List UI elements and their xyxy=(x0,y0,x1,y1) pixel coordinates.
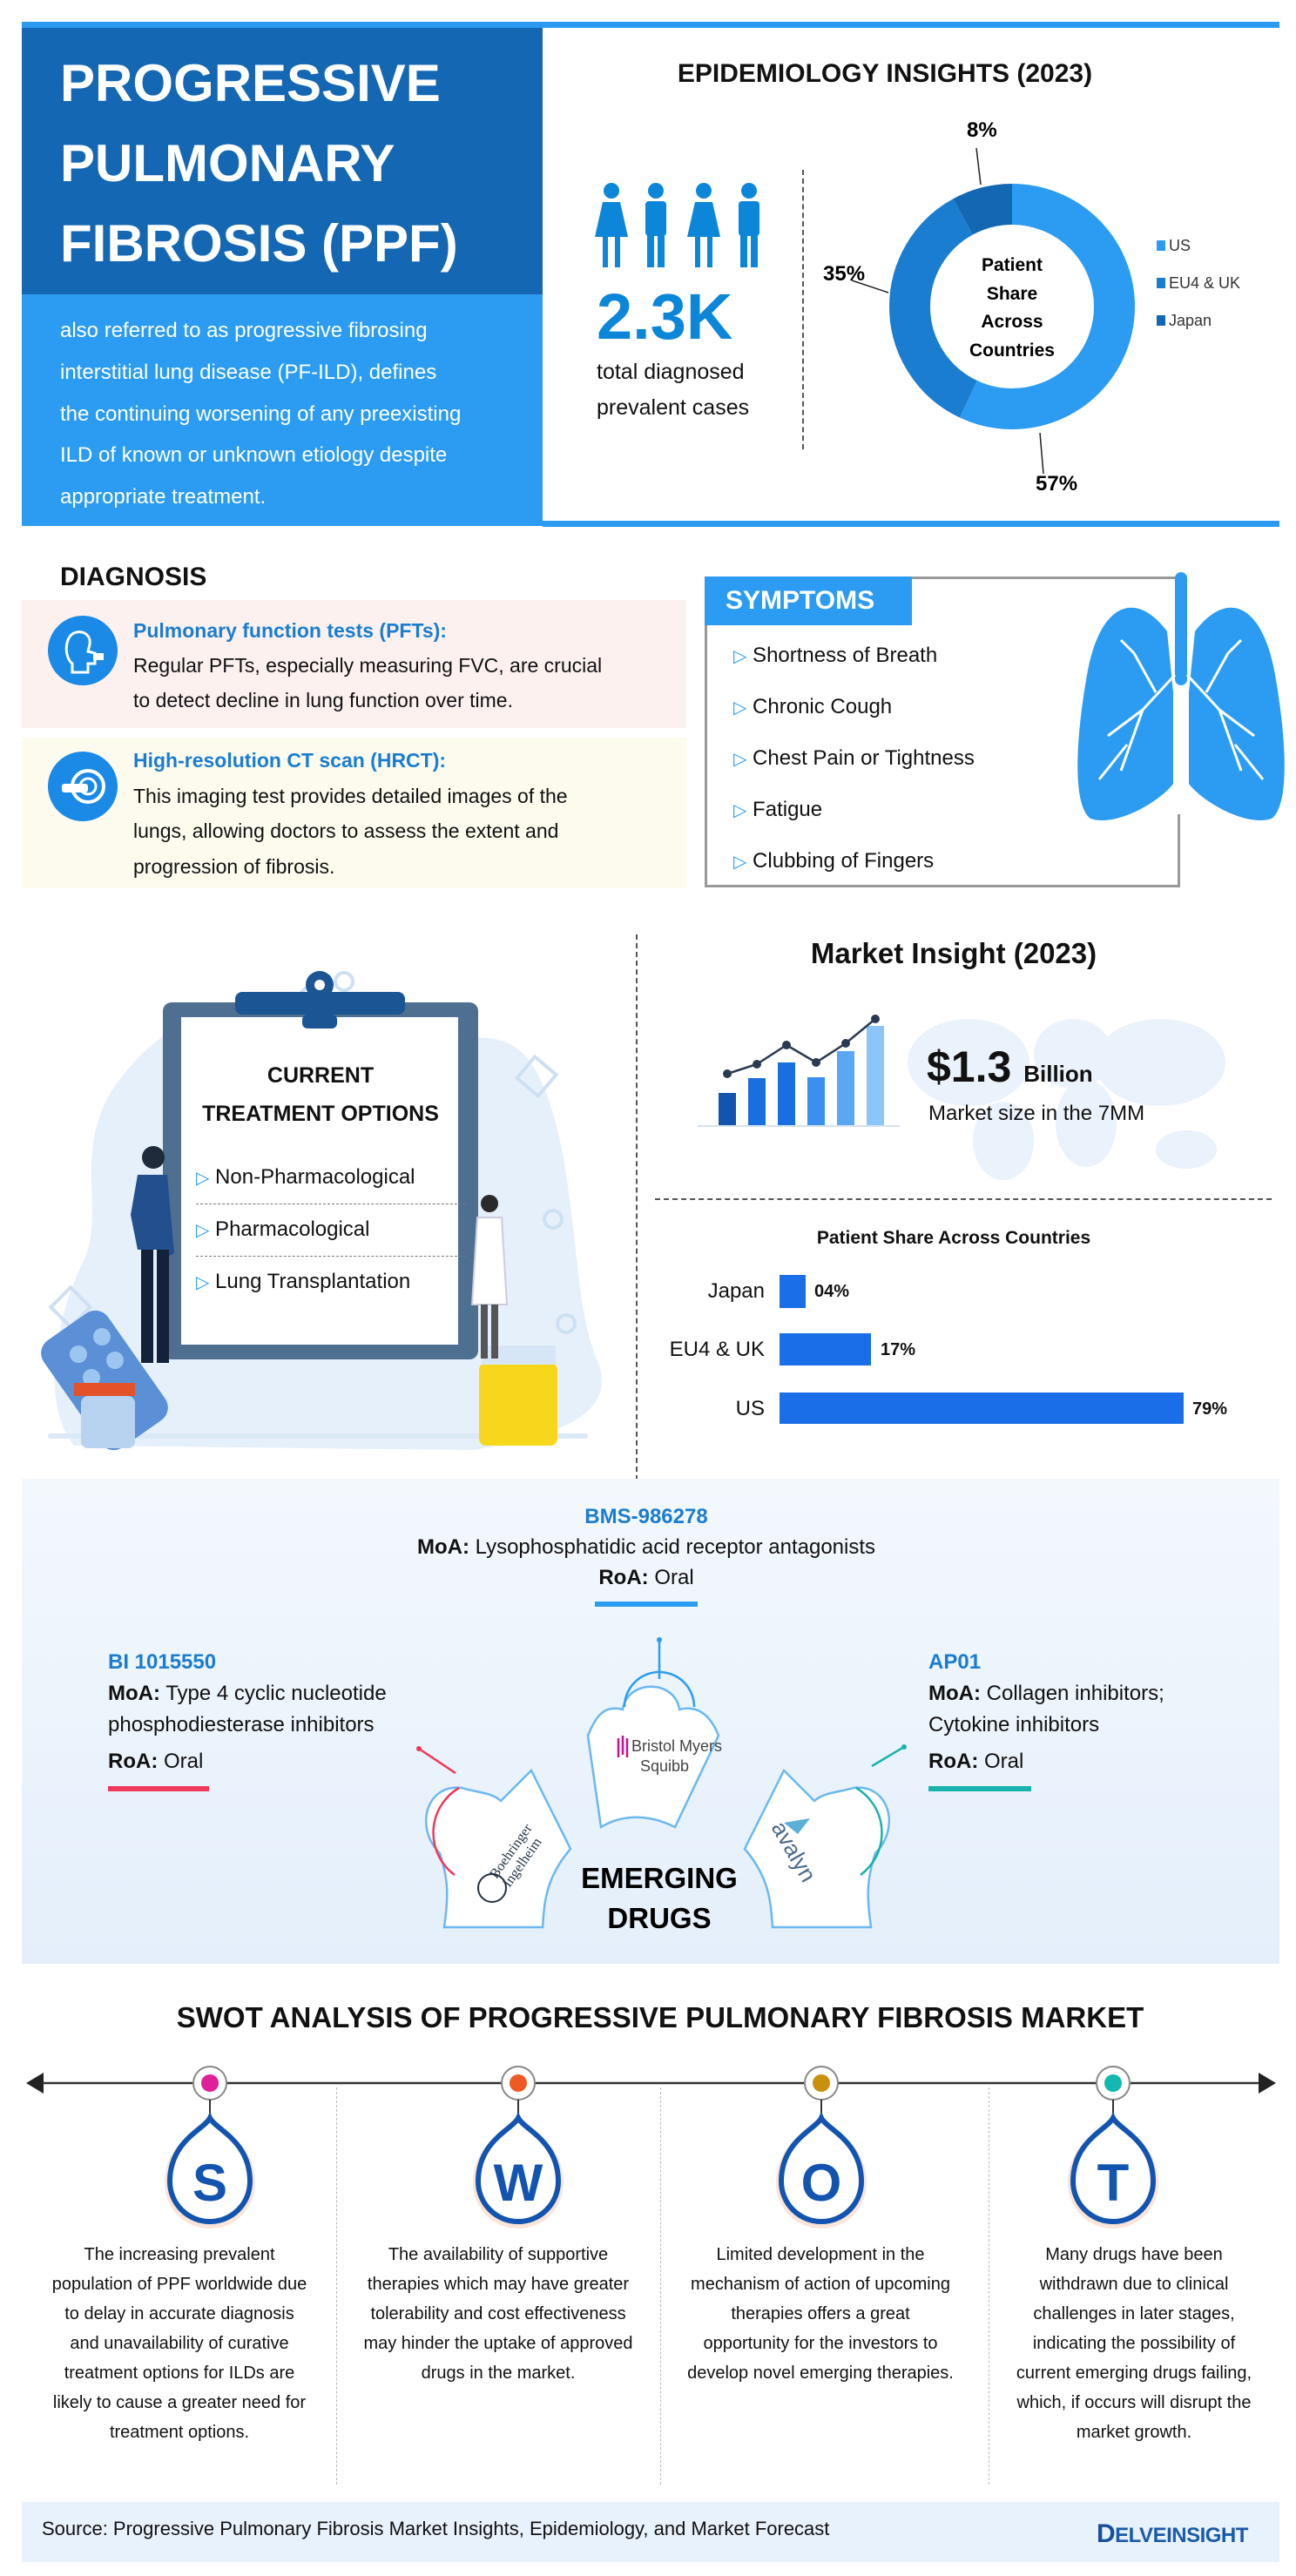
symptoms list: ▷ Shortness of Breath xyxy=(733,644,937,667)
bar chart: patient share: Patient Share Across Countries xyxy=(817,1228,1090,1248)
stat caption xyxy=(597,360,749,420)
SWOT: W: drugs in the market. xyxy=(422,2364,575,2383)
treatment heading: TREATMENT OPTIONS xyxy=(202,1102,439,1126)
drug: BI 1015550 xyxy=(108,1650,387,1791)
description text: also referred to as progressive fibrosing xyxy=(60,319,428,342)
bar chart: patient share: EU4 & UK xyxy=(670,1338,765,1361)
HRCT text: This imaging test provides detailed images of the xyxy=(133,784,568,806)
SWOT: T: which, if occurs will disrupt the xyxy=(1017,2393,1251,2412)
SWOT: O: Limited development in the xyxy=(716,2245,925,2264)
drug: AP01: Cytokine inhibitors xyxy=(928,1713,1099,1736)
dividers xyxy=(336,2087,337,2485)
world map bg xyxy=(908,1019,1225,1180)
SWOT: S: S xyxy=(192,2154,227,2212)
treatment list: ▷ Non-Pharmacological xyxy=(196,1165,415,1189)
symptoms header: SYMPTOMS xyxy=(726,586,874,615)
description text: appropriate treatment. xyxy=(60,485,266,509)
PFT text xyxy=(133,619,602,711)
timeline xyxy=(26,2073,1276,2094)
donut chart: Countries xyxy=(969,341,1055,361)
drug: BMS-986278 xyxy=(417,1505,875,1607)
treatment list: ▷ Pharmacological xyxy=(196,1217,369,1241)
icon: people xyxy=(595,183,759,267)
emerging drugs graphic: avalyn xyxy=(766,1817,821,1886)
HRCT text: High-resolution CT scan (HRCT): xyxy=(133,749,446,772)
epidemiology heading: EPIDEMIOLOGY INSIGHTS (2023) xyxy=(678,59,1092,88)
SWOT: T: indicating the possibility of xyxy=(1033,2334,1235,2353)
heading: diagnosis: DIAGNOSIS xyxy=(60,563,206,591)
SWOT: S: The increasing prevalent xyxy=(84,2245,275,2264)
SWOT: O: O xyxy=(801,2154,841,2212)
HRCT text: progression of fibrosis. xyxy=(133,855,334,878)
icon: pft xyxy=(48,616,118,685)
donut chart: Across xyxy=(981,312,1043,332)
panel: HRCT xyxy=(22,738,686,888)
emerging drugs graphic xyxy=(416,1637,907,1934)
legend: Japan xyxy=(1169,312,1212,329)
HRCT text: lungs, allowing doctors to assess the extent and xyxy=(133,819,558,842)
bar chart: patient share: US xyxy=(736,1397,765,1420)
SWOT: S: to delay in accurate diagnosis xyxy=(64,2304,294,2323)
drug: BMS-986278: RoA: Oral xyxy=(598,1566,694,1589)
symptoms list: ▷ Chronic Cough xyxy=(733,695,892,718)
panel: epidemiology xyxy=(595,59,1240,496)
panel: market insight xyxy=(655,937,1272,1424)
symptoms list: ▷ Fatigue xyxy=(733,798,822,821)
SWOT: S: treatment options for ILDs are xyxy=(64,2364,294,2383)
PFT text: Pulmonary function tests (PFTs): xyxy=(133,619,447,642)
drug: AP01: AP01 xyxy=(928,1650,981,1674)
SWOT: S: population of PPF worldwide due xyxy=(52,2275,307,2294)
market heading: Market Insight (2023) xyxy=(811,937,1097,969)
drug: AP01: MoA: Collagen inhibitors; xyxy=(928,1682,1164,1705)
treatment list xyxy=(196,1165,466,1293)
panel: emerging drugs xyxy=(22,1479,1279,1964)
drug: AP01 xyxy=(928,1650,1164,1791)
SWOT: T: challenges in later stages, xyxy=(1033,2304,1235,2323)
bar chart: patient share: Japan xyxy=(708,1279,765,1303)
illustration: treatment background xyxy=(41,971,602,1451)
SWOT: T: market growth. xyxy=(1077,2423,1191,2442)
dashed divider xyxy=(802,170,804,449)
yellow bottle xyxy=(479,1363,557,1446)
symptoms list xyxy=(733,644,975,873)
bottom blue bar right xyxy=(543,521,1279,527)
drug: BI 1015550: BI 1015550 xyxy=(108,1650,216,1674)
market caption: Market size in the 7MM xyxy=(928,1102,1144,1125)
donut chart: 57% xyxy=(1036,472,1077,496)
pill pack xyxy=(35,1305,174,1456)
SWOT: W xyxy=(363,2066,633,2383)
SWOT: W: tolerability and cost effectiveness xyxy=(370,2304,626,2323)
stat caption: prevalent cases xyxy=(597,395,749,420)
drug: BI 1015550: MoA: Type 4 cyclic nucleotide xyxy=(108,1682,387,1705)
SWOT: T: withdrawn due to clinical xyxy=(1040,2275,1228,2294)
legend: US xyxy=(1169,237,1191,254)
market value: $1.3 Billion xyxy=(927,1042,1093,1091)
stat: 2.3K: 2.3K xyxy=(597,280,732,353)
treatment heading: CURRENT xyxy=(267,1063,374,1088)
emerging drugs graphic: DRUGS xyxy=(607,1902,712,1934)
description text: interstitial lung disease (PF-ILD), defines xyxy=(60,361,436,384)
SWOT: O: mechanism of action of upcoming xyxy=(691,2275,950,2294)
emerging drugs graphic: Squibb xyxy=(640,1757,689,1775)
SWOT: S: and unavailability of curative xyxy=(70,2334,289,2353)
emerging drugs graphic: Bristol Myers xyxy=(631,1737,722,1755)
right border segment of symptoms box xyxy=(1178,814,1180,887)
emerging drugs graphic: Ingelheim xyxy=(500,1835,545,1890)
symptoms header xyxy=(705,577,912,625)
icon: ct scan xyxy=(48,752,118,821)
emerging drugs graphic: Boehringer xyxy=(487,1821,536,1881)
panel: PFTs xyxy=(22,600,686,728)
treatment heading xyxy=(202,1063,439,1126)
SWOT: O xyxy=(687,2066,954,2383)
treatment list: ▷ Lung Transplantation xyxy=(196,1270,410,1293)
icon: lungs xyxy=(1077,572,1285,820)
source text: Source: Progressive Pulmonary Fibrosis Market Insights, Epidemiology, and Market Forecast xyxy=(42,2518,829,2539)
logo: DELVEINSIGHT xyxy=(1097,2519,1248,2548)
SWOT: T: current emerging drugs failing, xyxy=(1016,2364,1252,2383)
SWOT: O: develop novel emerging therapies. xyxy=(687,2364,954,2383)
drug: BI 1015550: phosphodiesterase inhibitors xyxy=(108,1713,375,1736)
dashed divider horizontal xyxy=(655,1198,1272,1200)
drug: BMS-986278: BMS-986278 xyxy=(584,1505,708,1528)
bar chart: patient share: 04% xyxy=(814,1282,849,1301)
legend: EU4 & UK xyxy=(1169,274,1240,292)
title text: PROGRESSIVE xyxy=(60,54,441,112)
drug: BMS-986278: MoA: Lysophosphatidic acid receptor antagonists xyxy=(417,1535,875,1559)
bar chart: patient share: 17% xyxy=(881,1340,915,1359)
bar chart icon xyxy=(698,1015,900,1127)
SWOT: W: may hinder the uptake of approved xyxy=(363,2334,633,2353)
donut chart: 35% xyxy=(823,262,865,286)
illustration: clipboard with treatment options xyxy=(163,1002,478,1359)
title text: PULMONARY xyxy=(60,134,395,192)
footer xyxy=(22,2502,1279,2562)
dashed divider vertical xyxy=(636,934,638,1480)
panel: symptoms xyxy=(705,577,1180,887)
description text: ILD of known or unknown etiology despite xyxy=(60,443,447,467)
drug: BI 1015550: RoA: Oral xyxy=(108,1750,203,1773)
illustration: doctor xyxy=(470,1195,508,1359)
SWOT: S: likely to cause a greater need for xyxy=(53,2393,306,2412)
bar chart: patient share: 79% xyxy=(1192,1399,1227,1419)
donut chart xyxy=(823,118,1135,496)
donut chart: Share xyxy=(987,284,1037,304)
PFT text: to detect decline in lung function over time. xyxy=(133,689,513,711)
SWOT: T xyxy=(1016,2066,1252,2442)
donut chart: 8% xyxy=(967,118,997,142)
symptoms list: ▷ Clubbing of Fingers xyxy=(733,849,934,873)
SWOT: W: therapies which may have greater xyxy=(368,2275,629,2294)
description panel xyxy=(22,294,543,526)
description text: the continuing worsening of any preexisting xyxy=(60,402,461,426)
symptoms list: ▷ Chest Pain or Tightness xyxy=(733,746,975,770)
SWOT: O: therapies offers a great xyxy=(731,2304,910,2323)
heading: SWOT: SWOT ANALYSIS OF PROGRESSIVE PULMONARY FIBROSIS MARKET xyxy=(177,2001,1144,2033)
SWOT: W: W xyxy=(494,2154,543,2212)
HRCT text xyxy=(133,749,568,878)
title panel xyxy=(22,28,543,294)
top blue bar xyxy=(22,22,1279,28)
stat caption: total diagnosed xyxy=(597,360,745,384)
SWOT: T: T xyxy=(1097,2154,1129,2212)
SWOT: T: Many drugs have been xyxy=(1045,2245,1223,2264)
icon: clipboard clip xyxy=(235,971,405,1028)
illustration: businessman xyxy=(131,1146,174,1363)
SWOT: S: treatment options. xyxy=(110,2423,249,2442)
PFT text: Regular PFTs, especially measuring FVC, are crucial xyxy=(133,654,602,677)
SWOT: S xyxy=(52,2066,307,2442)
legend xyxy=(1157,237,1240,329)
emerging drugs graphic: EMERGING xyxy=(581,1862,738,1894)
bar chart: patient share xyxy=(670,1228,1227,1424)
SWOT: O: opportunity for the investors to xyxy=(703,2334,938,2353)
title text: FIBROSIS (PPF) xyxy=(60,214,458,273)
SWOT: W: The availability of supportive xyxy=(388,2245,608,2264)
donut chart: Patient xyxy=(982,255,1043,275)
description text xyxy=(60,319,461,509)
title text xyxy=(60,54,458,273)
drug: AP01: RoA: Oral xyxy=(928,1750,1023,1773)
